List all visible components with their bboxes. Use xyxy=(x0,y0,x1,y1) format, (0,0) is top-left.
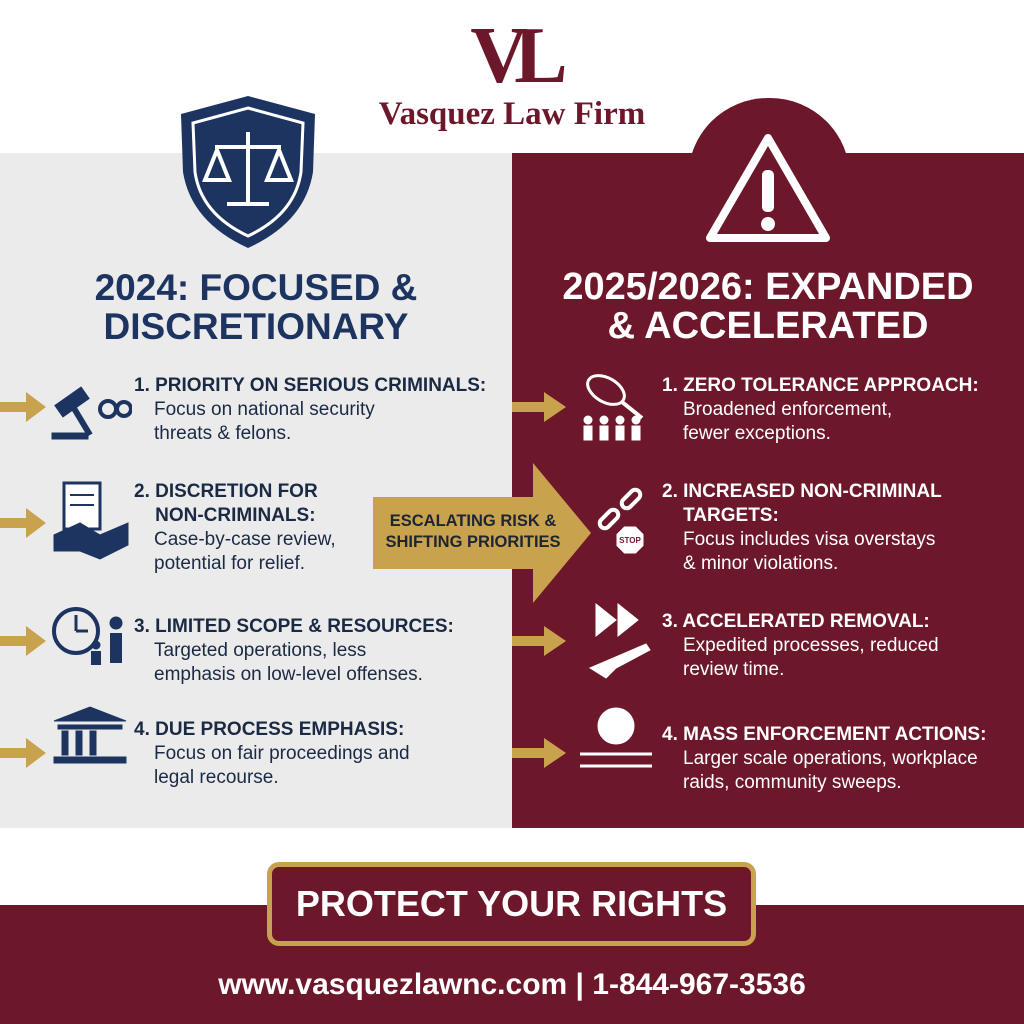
right item 1: fewer exceptions. xyxy=(683,423,831,444)
left item 4: Focus on fair proceedings and xyxy=(154,743,410,764)
right item 2: Focus includes visa overstays xyxy=(683,529,935,550)
right item 3: Expedited processes, reduced xyxy=(683,635,939,656)
icon: warning triangle xyxy=(706,134,830,242)
icon: shield with scales xyxy=(181,96,315,248)
right item 4: raids, community sweeps. xyxy=(683,772,902,793)
right item 2: & minor violations. xyxy=(683,553,838,574)
right panel tab xyxy=(688,98,850,218)
left item 3: 3. LIMITED SCOPE & RESOURCES: xyxy=(134,616,454,637)
left item 2 xyxy=(134,481,336,574)
heading right: & ACCELERATED xyxy=(608,305,928,347)
logo: Vasquez Law Firm xyxy=(379,96,645,132)
center arrow: escalating risk: SHIFTING PRIORITIES xyxy=(385,533,561,551)
left panel xyxy=(0,153,512,828)
center arrow: escalating risk xyxy=(373,463,591,603)
bottom band xyxy=(0,905,1024,1024)
left item 1: 1. PRIORITY ON SERIOUS CRIMINALS: xyxy=(134,375,486,396)
left item 2: potential for relief. xyxy=(154,553,305,574)
logo: VL xyxy=(470,12,554,100)
left item 4 xyxy=(134,719,410,788)
center arrow: escalating risk: ESCALATING RISK & xyxy=(390,512,556,530)
left item 4: 4. DUE PROCESS EMPHASIS: xyxy=(134,719,404,740)
right item 3: review time. xyxy=(683,659,784,680)
left arrows xyxy=(0,392,46,768)
left item 4: legal recourse. xyxy=(154,767,279,788)
left item 3: emphasis on low-level offenses. xyxy=(154,664,423,685)
right item 1: 1. ZERO TOLERANCE APPROACH: xyxy=(662,375,979,396)
right item 2: TARGETS: xyxy=(683,505,779,526)
right panel xyxy=(512,153,1024,828)
right item 1 xyxy=(662,375,979,444)
left item 3 xyxy=(134,616,454,685)
right item 3: 3. ACCELERATED REMOVAL: xyxy=(662,611,930,632)
left item 1: Focus on national security xyxy=(154,399,375,420)
right item 1: Broadened enforcement, xyxy=(683,399,892,420)
heading left: DISCRETIONARY xyxy=(104,306,408,347)
right item 2 xyxy=(662,481,942,574)
right arrows xyxy=(512,392,566,768)
left icons xyxy=(52,386,132,764)
heading left xyxy=(95,267,417,347)
left item 2: Case-by-case review, xyxy=(154,529,336,550)
footer contact: www.vasquezlawnc.com | 1-844-967-3536 xyxy=(218,968,806,1001)
left item 2: NON-CRIMINALS: xyxy=(155,505,316,526)
heading right xyxy=(562,266,974,347)
right item 4 xyxy=(662,724,986,793)
button: protect your rights: PROTECT YOUR RIGHTS xyxy=(296,883,727,924)
button: protect your rights xyxy=(267,862,756,946)
right item 4: 4. MASS ENFORCEMENT ACTIONS: xyxy=(662,724,986,745)
logo xyxy=(379,12,645,132)
right icons: STOP xyxy=(619,536,641,545)
right item 3 xyxy=(662,611,939,680)
right item 2: 2. INCREASED NON-CRIMINAL xyxy=(662,481,942,502)
heading right: 2025/2026: EXPANDED xyxy=(562,266,974,308)
left item 2: 2. DISCRETION FOR xyxy=(134,481,318,502)
right icons xyxy=(580,374,652,768)
left item 1: threats & felons. xyxy=(154,423,291,444)
right item 4: Larger scale operations, workplace xyxy=(683,748,978,769)
left item 3: Targeted operations, less xyxy=(154,640,366,661)
left item 1 xyxy=(134,375,486,444)
heading left: 2024: FOCUSED & xyxy=(95,267,417,308)
